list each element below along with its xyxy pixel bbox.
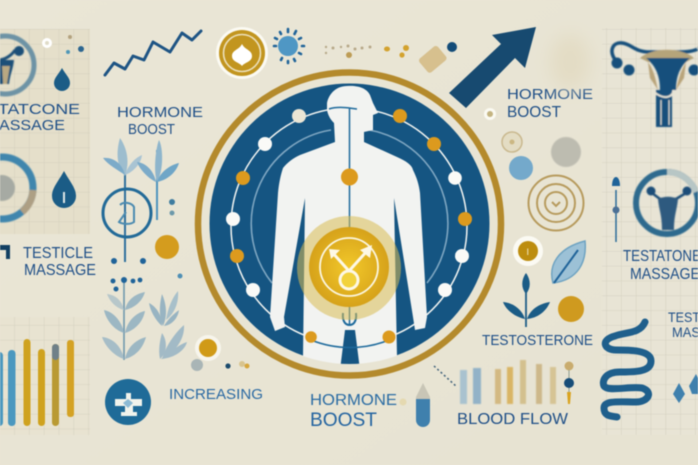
icon: gold dot with halo bbox=[195, 335, 221, 361]
icon: ring with uterus, top left bbox=[0, 36, 34, 94]
inner faint arcs bbox=[251, 130, 448, 283]
groin detail bbox=[314, 306, 386, 365]
dashed connector bbox=[434, 366, 457, 387]
icon: tan tag bbox=[418, 45, 448, 74]
icon: lower plants bbox=[102, 274, 187, 360]
icon: drop with line bbox=[52, 171, 76, 208]
icon: pin with line bbox=[612, 177, 620, 242]
decorative dots lower middle bbox=[191, 359, 250, 371]
icon: donut chart left bbox=[0, 157, 33, 219]
text: testicle massage bbox=[23, 245, 96, 279]
text: testatone massage right bbox=[623, 248, 698, 283]
icon: blue sun bbox=[274, 29, 304, 63]
text: increasing: INCREASING bbox=[169, 387, 263, 403]
bar chart left bbox=[0, 339, 74, 426]
icon: plant with circle bbox=[103, 138, 179, 264]
icon: numbered gold dot bbox=[513, 236, 543, 266]
head band bbox=[329, 107, 357, 109]
text: testatcone massage left: TATCONE bbox=[0, 101, 80, 118]
icon: zigzag trend line bbox=[105, 31, 201, 75]
icon: numbered gold dot: I bbox=[526, 247, 529, 257]
text: hormone boost bottom: BOOST bbox=[310, 410, 377, 431]
text: testosterone: TESTOSTERONE bbox=[482, 332, 593, 349]
decorative blurred blotch bbox=[550, 34, 590, 90]
text: testicle massage: MASSAGE bbox=[24, 262, 96, 279]
text: testatcone massage left: ASSAGE bbox=[0, 117, 65, 134]
icon: sprout bbox=[503, 273, 550, 327]
text: blood flow: BLOOD FLOW bbox=[457, 411, 569, 428]
node ring bbox=[231, 108, 467, 344]
text: hormone boost upper left: HORMONE bbox=[117, 104, 203, 121]
panel: right grid bbox=[602, 28, 698, 435]
icon: gold dot right bbox=[558, 296, 584, 322]
text: testicle massage: TESTICLE bbox=[23, 245, 93, 262]
centre gold node bbox=[341, 168, 358, 186]
icon: uterus top right bbox=[612, 43, 698, 127]
white nodes bbox=[226, 137, 469, 297]
body silhouette bbox=[270, 86, 427, 370]
bar chart: blood flow bars bbox=[460, 360, 556, 404]
icon: arrow fragment bbox=[0, 245, 10, 259]
glowing hormone circle bbox=[297, 216, 401, 320]
icon: leaf outline bbox=[552, 241, 585, 283]
text: test mas right bbox=[668, 310, 698, 340]
text: hormone boost bottom bbox=[310, 392, 397, 431]
icons: small circles right of ring bbox=[484, 108, 581, 180]
text: hormone boost upper left: BOOST bbox=[128, 121, 175, 138]
text: hormone boost bottom: HORMONE bbox=[310, 392, 397, 409]
icon: navy dot bbox=[447, 42, 457, 52]
icon: concentric gold target bbox=[528, 176, 584, 230]
text: hormone boost upper left bbox=[117, 104, 203, 138]
gold nodes bbox=[230, 109, 472, 344]
text: hormone boost upper right: BOOST bbox=[507, 104, 562, 121]
decorative dots upper left bbox=[42, 35, 84, 54]
text: hormone boost upper right bbox=[507, 86, 593, 121]
icon: dropper dots bbox=[564, 362, 574, 404]
spine line bbox=[348, 108, 350, 240]
icon: test tube bbox=[416, 383, 430, 427]
decorative tan dot bbox=[400, 398, 406, 406]
icon: small blue drops bbox=[673, 374, 698, 403]
icon: blue circle with cross bbox=[105, 379, 151, 425]
icon: drop upper left bbox=[54, 68, 70, 91]
text: hormone boost upper right: HORMONE bbox=[507, 86, 593, 103]
panel: left grid lower bbox=[0, 317, 90, 435]
blue disc bbox=[210, 84, 490, 364]
gold outer ring bbox=[198, 72, 501, 376]
panel: left grid upper bbox=[0, 29, 90, 234]
decorative dots top bbox=[325, 44, 409, 58]
icon: wavy intestine line bbox=[603, 322, 651, 417]
central figure panel bbox=[198, 72, 501, 376]
icon: ring with uterus right bbox=[636, 172, 698, 234]
text: testatcone massage left bbox=[0, 101, 80, 134]
cream node bbox=[292, 109, 306, 123]
arrow: upward trend bbox=[449, 27, 536, 108]
icon: heart badge bbox=[216, 27, 268, 79]
icon: gold dot bbox=[155, 235, 179, 259]
